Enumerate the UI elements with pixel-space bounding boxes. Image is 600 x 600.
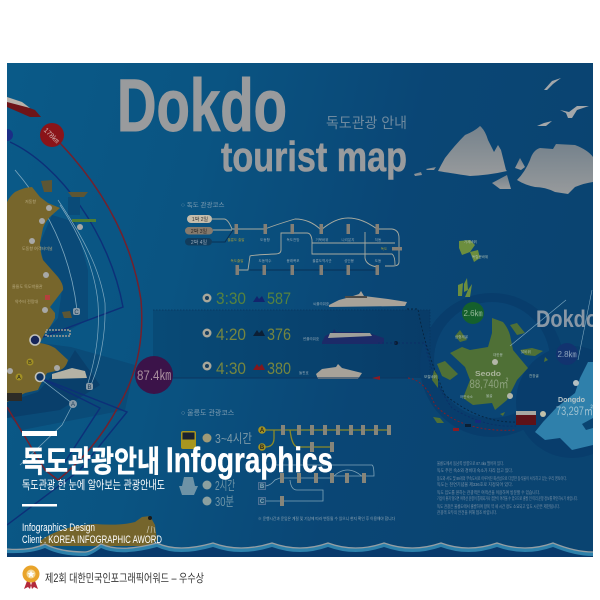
- station labels: 봉래폭포: [287, 258, 300, 263]
- map: Seodo island: 어민숙소: [460, 394, 474, 399]
- pointer lines: [510, 290, 592, 360]
- ferry row: 3:30 / 587: [202, 291, 407, 307]
- distance badge: 178km: 178㎞: [42, 126, 61, 145]
- station labels: 독도전망: [287, 237, 300, 242]
- map: Ulleungdo mainland: 도동항 여객터미널: [22, 245, 53, 251]
- map: Ulleungdo mainland: A: [17, 375, 21, 381]
- station markers: [234, 224, 402, 275]
- course badges: [258, 426, 266, 505]
- station labels: 울릉도역사관: [312, 258, 332, 263]
- route diagram: Ulleungdo tours: [179, 408, 395, 521]
- main title: Infographics: [166, 441, 333, 480]
- map: Dongdo island: [535, 362, 593, 450]
- course pills: 2박 4일: [191, 239, 207, 246]
- station labels: 저동: [375, 237, 382, 242]
- map: Ulleungdo mainland: 저동항: [25, 198, 36, 204]
- map: Seodo island: 보찰바위: [424, 374, 437, 379]
- waves: [7, 543, 593, 557]
- main title: 독도관광안내: [22, 446, 160, 479]
- ferry row: 4:20 / 376: 썬플라워호: [303, 336, 320, 341]
- award text: 제2회 대한민국인포그래픽어워드 – 우수상: [45, 572, 204, 585]
- route lines to Dokdo: [153, 309, 516, 430]
- ferry row: 4:20 / 376: 376: [267, 325, 291, 344]
- course pills: [185, 215, 213, 246]
- route diagram: Ulleungdo tours: 30분: [215, 494, 234, 509]
- port grid: [46, 330, 70, 336]
- ferry row: 4:20 / 376: [202, 328, 398, 345]
- distance badge: 87.4km: 87.4㎞: [137, 367, 171, 383]
- course badges: B: [260, 445, 265, 451]
- course badges: A: [260, 428, 265, 434]
- seodo label: Seodo: [475, 369, 501, 378]
- icon: bus: [181, 431, 196, 449]
- title block: [22, 431, 333, 546]
- islet labels: [464, 239, 488, 259]
- distance badge: blue: [7, 129, 13, 141]
- route diagram: Dokdo tours: ○ 독도 관광코스: [181, 200, 224, 209]
- text block: Dokdo description: 독도는 천연기념물 제336호로 지정되어 있다.: [437, 481, 513, 488]
- distance badge: 87.4km: [135, 356, 173, 394]
- map: Seodo island: [424, 318, 548, 423]
- text block: Dokdo description: 독도 주민 숙소와 경비대 숙소가 자리 잡고 있다.: [437, 467, 513, 474]
- heading: Dokdo tourist map: [120, 76, 406, 180]
- map: Seodo island: 대한봉: [493, 352, 503, 357]
- route markers A, B, C: A: [71, 402, 75, 408]
- course lines: [212, 230, 377, 270]
- wharf icon: [516, 411, 536, 425]
- text block: Dokdo description: 독도 관광은 울릉도에서 출발하며 왕복 약 세 시간 정도 소요되고 입도 시간은 제한됩니다.: [437, 503, 560, 510]
- route markers: [372, 376, 481, 431]
- map: Seodo island: 닭바위: [521, 349, 531, 354]
- station labels: 울릉도 출발: [227, 237, 245, 242]
- distance badge: 2.8km: [556, 343, 578, 365]
- distance badge: 2.6km: [462, 302, 484, 324]
- text block: Dokdo description: 독도 입도를 원하는 관광객은 여객선을 이용하여 방문할 수 있습니다.: [437, 489, 540, 496]
- course lines: [265, 430, 390, 501]
- route markers A, B, C: C: [74, 310, 79, 316]
- station labels: 도동약수: [259, 258, 272, 263]
- station markers: [280, 425, 391, 506]
- course badges: C: [260, 499, 265, 505]
- course pills: 1박 2일: [192, 216, 208, 223]
- station labels: 나리분지: [342, 237, 354, 242]
- station labels: 독도출발: [231, 258, 244, 263]
- illustration: seal: [40, 516, 157, 546]
- distance badge: 2.6km: 2.6㎞: [463, 309, 483, 318]
- text block: Dokdo description: [437, 460, 578, 516]
- station labels: 도동: [375, 259, 382, 263]
- ferry row: 4:30 / 380: 4:30: [216, 359, 246, 378]
- islet labels: 가제바위: [464, 239, 477, 244]
- map: Seodo island: 88,740㎡: [470, 377, 508, 391]
- ferry row: 3:30 / 587: 3:30: [216, 289, 246, 308]
- station labels: [227, 237, 388, 263]
- station labels: 성인봉: [344, 258, 355, 263]
- ferry row: 4:30 / 380: [202, 362, 362, 379]
- map: Dongdo island: Dongdo: [558, 395, 585, 404]
- sea zone around Dokdo: [422, 294, 536, 436]
- main title: [22, 441, 333, 480]
- heading: Dokdo tourist map: tourist map: [221, 133, 407, 180]
- heading: Dokdo tourist map: 독도관광 안내: [326, 115, 407, 132]
- illustration: Dokdo rock islands: [414, 126, 593, 194]
- heading: Dokdo tourist map: Dokdo: [117, 64, 287, 147]
- lower bar: [22, 504, 57, 506]
- small northern islets: [458, 240, 480, 297]
- icon: boat: [179, 477, 198, 495]
- route markers A, B, C: B: [87, 385, 92, 391]
- subtitle: 독도관광 한 눈에 알아보는 관광안내도: [22, 478, 165, 492]
- dark route band: [153, 310, 430, 378]
- map: Seodo island: 삼형제굴: [455, 334, 469, 339]
- distance badge: 2.8km: 2.8㎞: [557, 350, 577, 359]
- map: Ulleungdo mainland: B: [28, 360, 32, 366]
- ferry row: 3:30 / 587: 씨플라워호: [313, 301, 330, 306]
- title block: Client : KOREA INFOGRAPHIC AWORD: [22, 534, 162, 546]
- distance arcs: [7, 142, 142, 525]
- station labels: 도동항: [260, 237, 271, 242]
- text block: Dokdo description: 울릉도에서 동남쪽 방향으로 87.4㎞ 떨어져 있다.: [437, 460, 504, 467]
- route diagram: Ulleungdo tours: 2시간: [215, 478, 235, 493]
- route diagram: Dokdo tours: [181, 200, 402, 275]
- map: Ulleungdo mainland: 울릉도 독도박물관: [12, 283, 43, 289]
- station labels: 거북바위: [316, 237, 328, 242]
- ferry row: 4:20 / 376: 4:20: [216, 325, 246, 344]
- course pills: 2박 3일: [191, 228, 207, 235]
- route markers A, B, C: [69, 308, 93, 408]
- text block: Dokdo description: 관광객 모두의 안전을 위해 협조 바랍니다.: [437, 509, 497, 516]
- credit: Infographics Design: [22, 522, 95, 534]
- sea zone near Ulleungdo: [7, 343, 135, 430]
- icon: award medal: [22, 566, 40, 589]
- islet labels: 독립문바위: [472, 254, 488, 259]
- station labels: 독도: [381, 247, 388, 251]
- route diagram: Ulleungdo tours: ○ 울릉도 관광코스: [181, 408, 235, 417]
- ship at port: [52, 368, 87, 379]
- ferry row: 3:30 / 587: 587: [267, 289, 291, 308]
- icon: seagulls: [537, 78, 589, 126]
- course badges: B: [260, 484, 265, 490]
- ferry row: 4:30 / 380: 돌핀호: [299, 370, 309, 375]
- route diagram: Ulleungdo tours: 3~4시간: [215, 431, 252, 446]
- route diagram: Ulleungdo tours: ※ 운행시간과 운임은 계절 및 기상에 따라 변동될 수 있으니 현지 확인 후 이용해야 합니다: [258, 515, 395, 521]
- red route ship: [7, 97, 41, 117]
- map: Ulleungdo mainland: 약수터 전망대: [15, 298, 39, 304]
- map: Seodo island: 천장굴: [529, 373, 539, 378]
- map: Ulleungdo mainland: [7, 180, 96, 402]
- ferry row: 4:30 / 380: 380: [267, 359, 291, 378]
- map: Seodo island: 물골: [486, 393, 493, 398]
- title bar: [22, 431, 57, 436]
- distance badge: 178km: [40, 123, 64, 147]
